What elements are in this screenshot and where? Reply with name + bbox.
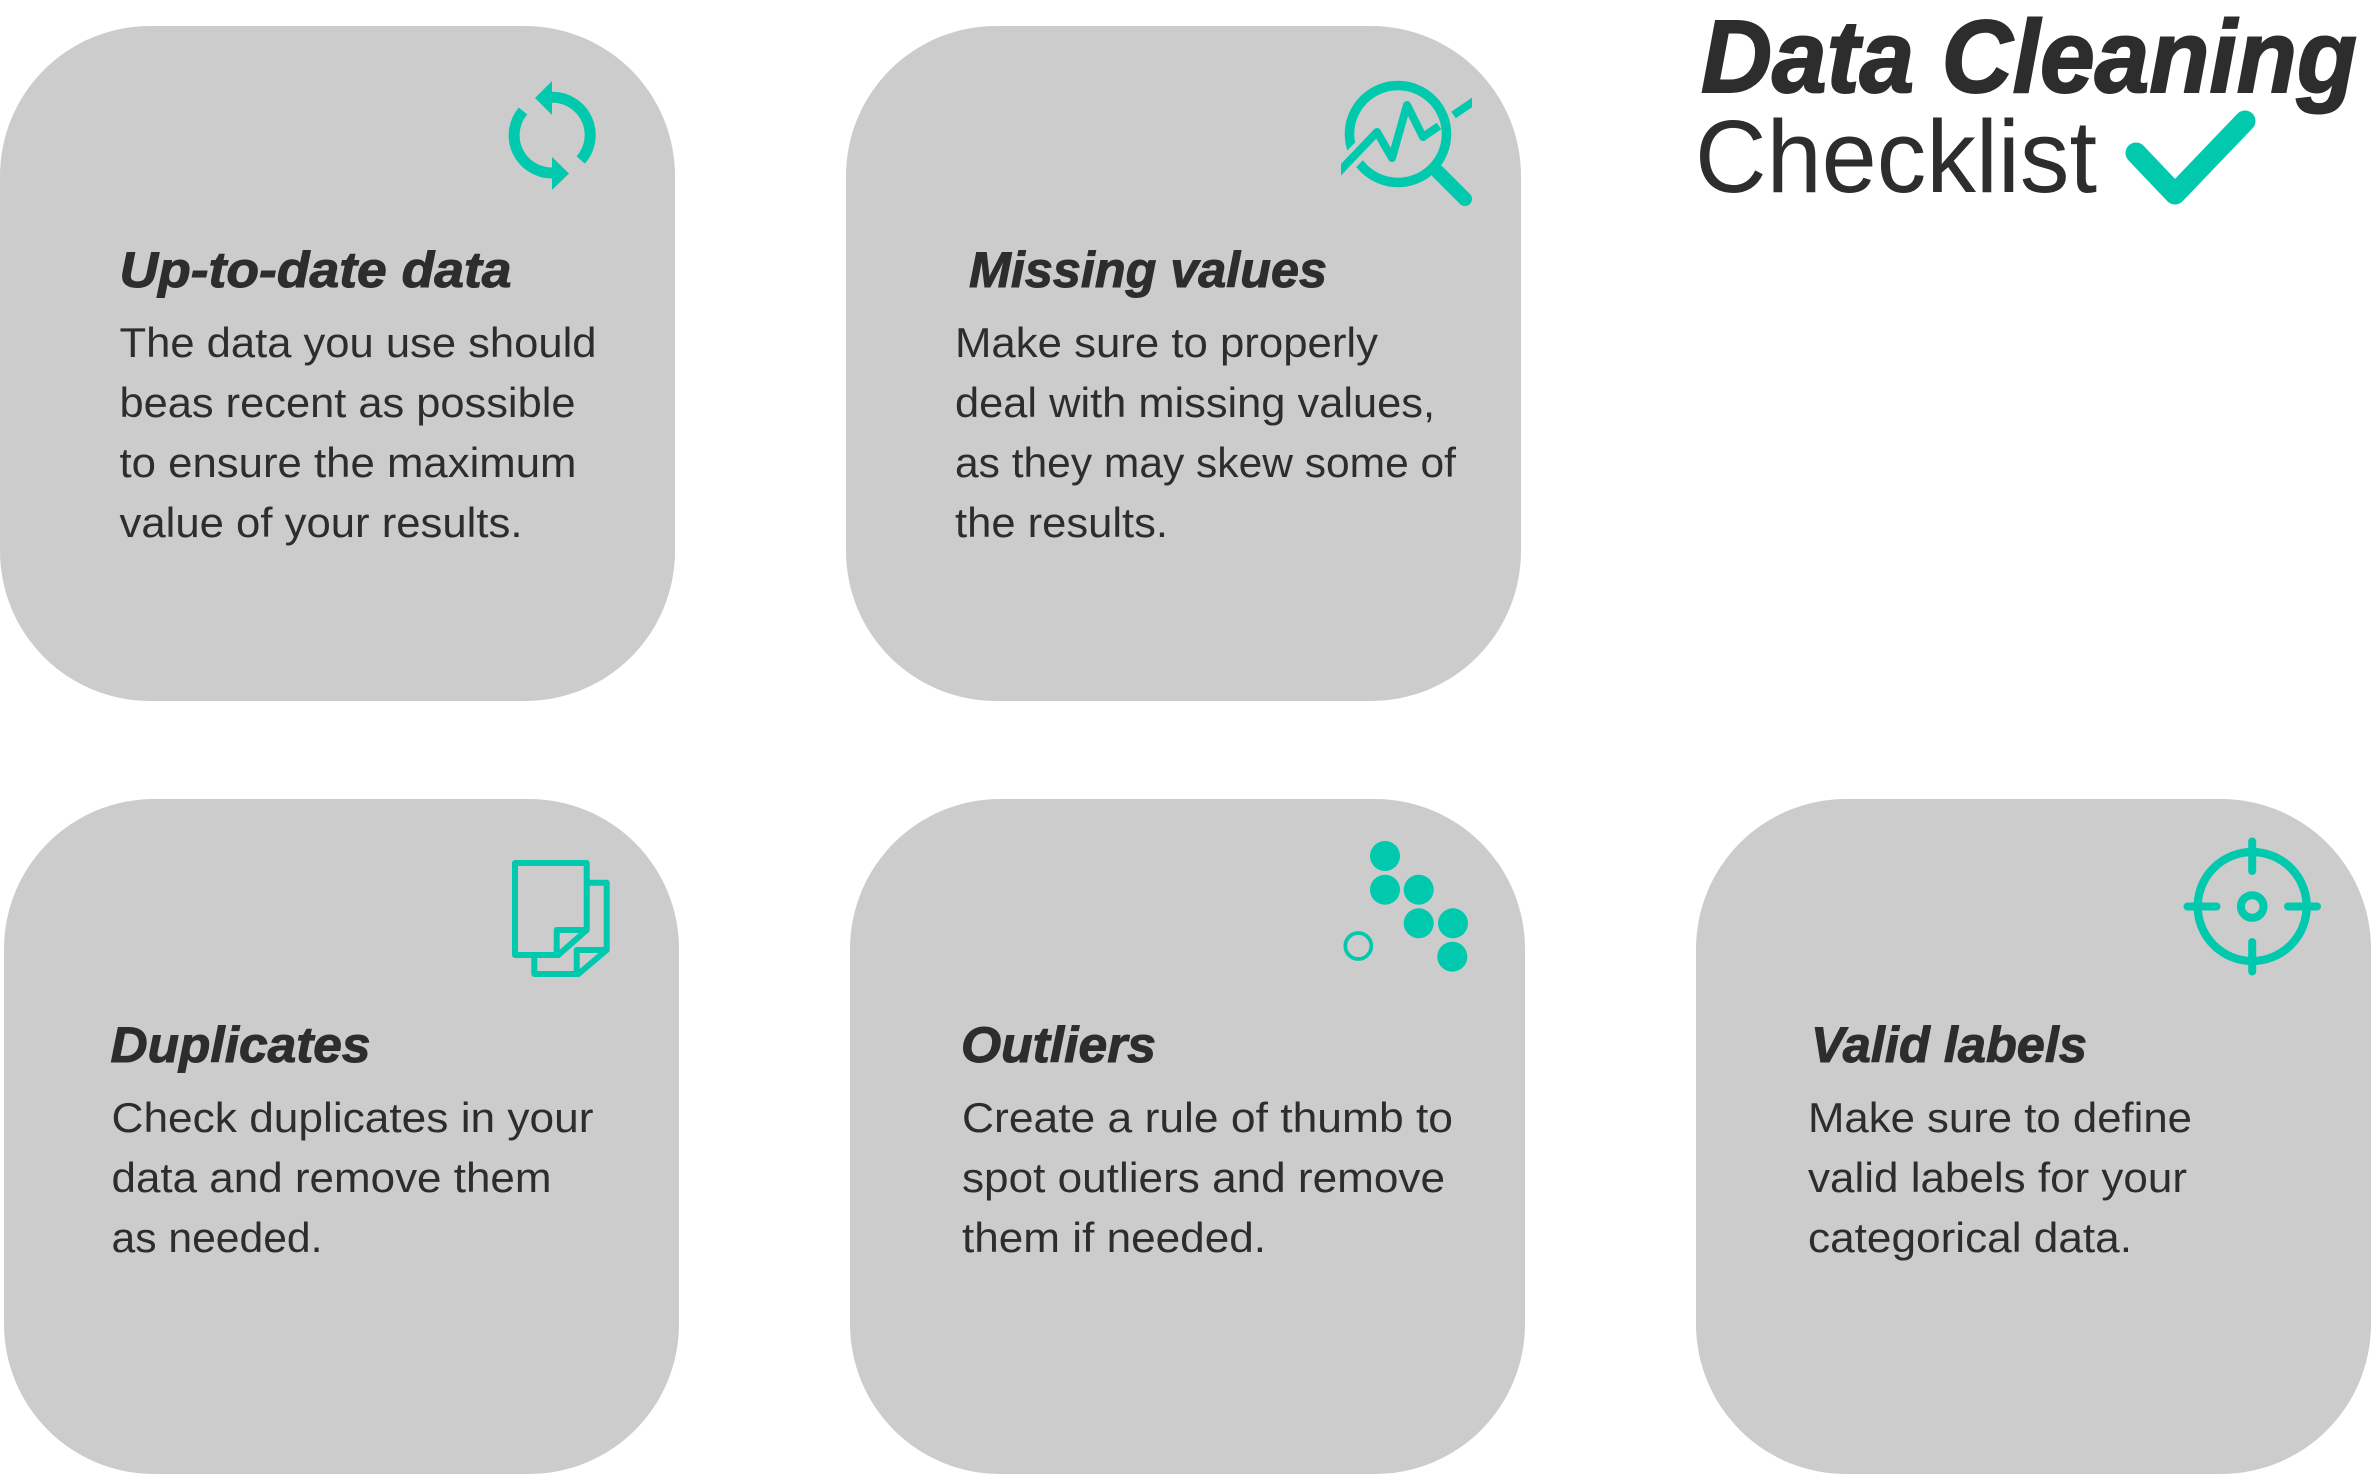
heading: duplicates: Duplicates [110,1017,370,1073]
body: outliers: Create a rule of thumb to [962,1094,1453,1141]
title: Checklist [1695,99,2097,214]
panel: valid labels [1696,799,2371,1474]
body: valid labels: categorical data. [1808,1214,2132,1261]
icon: outlier dots [1345,841,1468,972]
icon: check mark [2136,121,2245,194]
body: up-to-date data: value of your results. [120,499,522,546]
body: duplicates [112,1094,594,1261]
heading: up-to-date data: Up-to-date data [120,242,512,298]
body: outliers [962,1094,1453,1261]
body: missing values: deal with missing values, [955,379,1435,426]
body: valid labels: Make sure to define [1808,1094,2192,1141]
body: missing values: Make sure to properly [955,319,1378,366]
body: up-to-date data: The data you use should [120,319,596,366]
body: duplicates: Check duplicates in your [112,1094,594,1141]
body: up-to-date data: to ensure the maximum [120,439,576,486]
body: valid labels: valid labels for your [1808,1154,2187,1201]
heading: missing values: Missing values [969,242,1327,298]
body: up-to-date data: beas recent as possible [120,379,576,426]
body: outliers: spot outliers and remove [962,1154,1445,1201]
panel: missing values [846,26,1521,701]
body: missing values: the results. [955,499,1168,546]
panel: duplicates [4,799,679,1474]
body: missing values [955,319,1456,546]
body: duplicates: as needed. [112,1214,322,1261]
icon: crosshair target [2188,842,2317,972]
body: up-to-date data [120,319,596,546]
panel: outliers [850,799,1525,1474]
body: duplicates: data and remove them [112,1154,552,1201]
icon: duplicate pages [515,863,607,974]
title [1695,0,2357,214]
title: Data Cleaning [1701,0,2357,114]
body: outliers: them if needed. [962,1214,1266,1261]
icon: refresh arrows [514,81,590,190]
body: missing values: as they may skew some of [955,439,1456,486]
panel: up-to-date data [0,26,675,701]
heading: valid labels: Valid labels [1811,1017,2087,1073]
icon: magnifier with chart line [1334,86,1480,199]
heading: outliers: Outliers [961,1017,1156,1073]
body: valid labels [1808,1094,2192,1261]
